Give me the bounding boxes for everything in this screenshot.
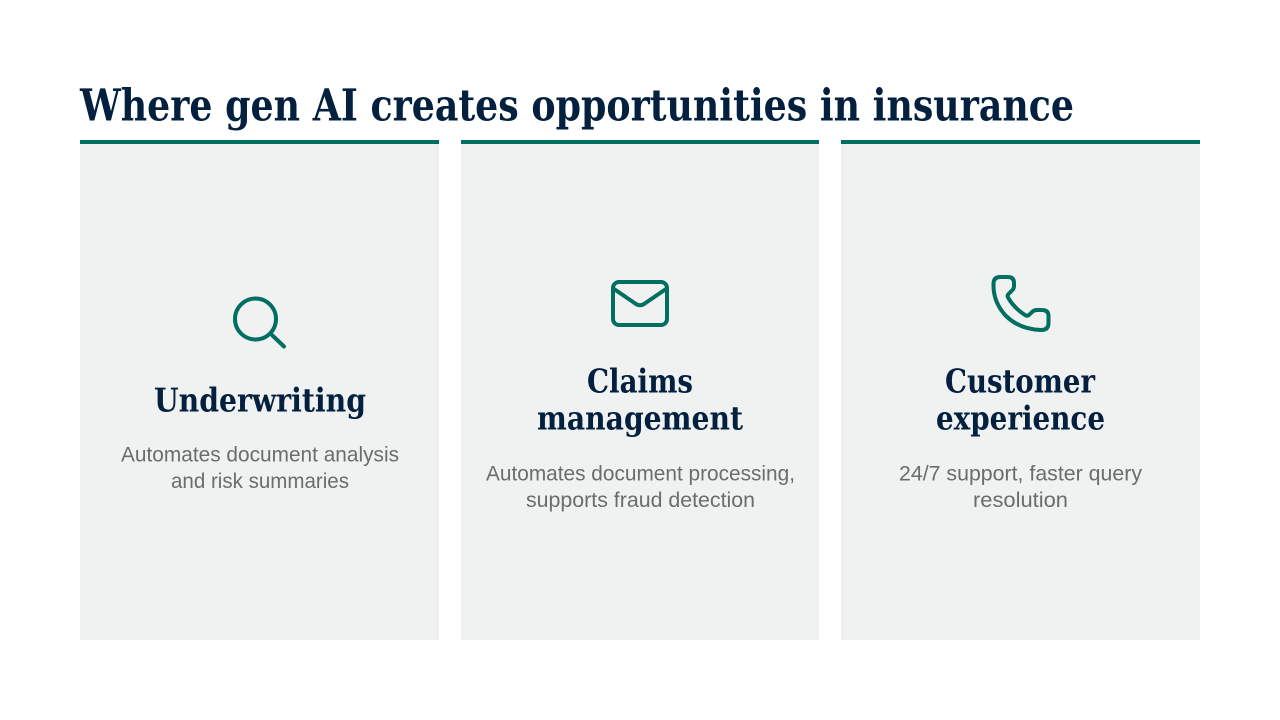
heading: claims management: management (537, 398, 744, 438)
text: customer description (899, 462, 1143, 512)
icon: magnifying glass (235, 298, 284, 346)
panel: customer experience (841, 140, 1200, 640)
heading: claims management: Claims (587, 362, 693, 400)
panel: claims management (461, 140, 819, 640)
text: claims description: supports fraud detection (526, 489, 755, 512)
heading: customer experience: Customer (945, 362, 1096, 400)
heading: customer experience: experience (936, 398, 1105, 438)
heading: customer experience (936, 362, 1105, 438)
panel: underwriting (80, 140, 439, 640)
icon: phone (993, 277, 1048, 330)
text: underwriting description: Automates document analysis (121, 444, 399, 466)
text: underwriting description (121, 444, 399, 493)
title: Where gen AI creates opportunities in insurance (79, 80, 1074, 132)
heading: claims management (537, 362, 744, 438)
heading: underwriting: Underwriting (154, 380, 366, 420)
text: customer description: 24/7 support, faster query (899, 462, 1143, 486)
text: customer description: resolution (973, 489, 1068, 512)
text: claims description: Automates document processing, (486, 462, 795, 486)
text: underwriting description: and risk summaries (171, 470, 349, 493)
text: claims description (486, 462, 795, 512)
icon: envelope (613, 282, 667, 325)
